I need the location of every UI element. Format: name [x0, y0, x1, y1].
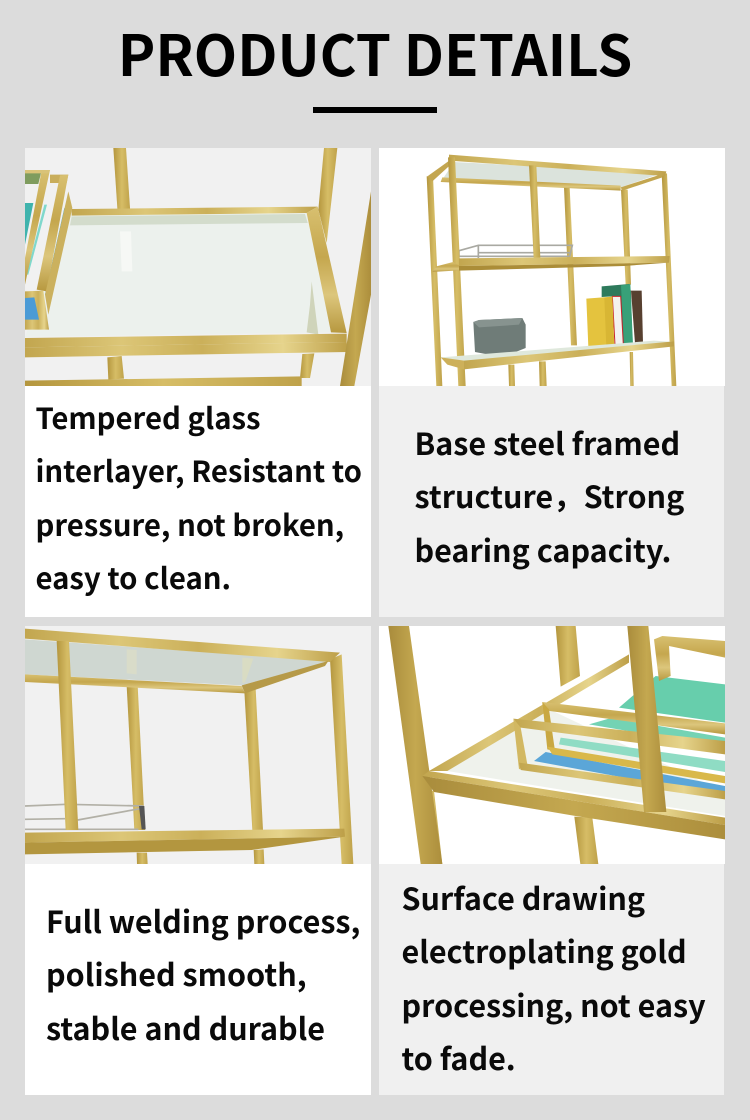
- panel: welding process: [25, 626, 371, 1095]
- caption: Base steel framed: [414, 420, 680, 464]
- middle shelf frame: [25, 829, 345, 854]
- front post: [627, 626, 666, 812]
- title underline: [313, 107, 437, 113]
- stack of books: [586, 284, 643, 347]
- caption: stable and durable: [46, 1005, 325, 1049]
- teal and blue linings: [534, 676, 725, 796]
- glass shelf top: [25, 213, 331, 337]
- back posts: [113, 148, 337, 243]
- stone ornament: [473, 318, 526, 358]
- photo: glass shelf close-up: [25, 148, 371, 386]
- caption: processing, not easy: [402, 982, 706, 1026]
- caption: Surface drawing: [402, 875, 645, 919]
- title: PRODUCT DETAILS: [118, 12, 632, 93]
- gold tray with teal lining: [25, 170, 72, 330]
- glass shelf surface: [447, 706, 725, 816]
- caption: structure，Strong: [414, 473, 684, 517]
- caption: polished smooth,: [46, 951, 307, 995]
- caption: easy to clean.: [36, 556, 231, 598]
- bottom glass shelf: [441, 341, 674, 369]
- shelf frame: [422, 654, 725, 839]
- caption: electroplating gold: [402, 928, 687, 972]
- left post: [388, 626, 442, 864]
- photo: frame corner close-up: [25, 626, 371, 864]
- caption: Tempered glass: [36, 396, 261, 438]
- tray corner: [139, 806, 146, 829]
- caption: pressure, not broken,: [36, 503, 344, 545]
- caption: [414, 420, 684, 571]
- chrome tray: [25, 804, 143, 829]
- caption: [402, 875, 706, 1079]
- photo: full shelving unit: [379, 148, 725, 386]
- top frame bars: [25, 629, 340, 693]
- top frame: [427, 155, 666, 191]
- tinted top glass: [25, 639, 330, 685]
- shelf frame: [25, 207, 348, 357]
- caption: interlayer, Resistant to: [36, 449, 362, 491]
- caption: [36, 396, 362, 598]
- panel: steel frame: [379, 148, 724, 617]
- caption: to fade.: [402, 1035, 516, 1079]
- top glass shelf: [442, 162, 662, 187]
- caption: Full welding process,: [46, 898, 360, 942]
- front post: [57, 641, 78, 830]
- panel: tempered glass: [25, 148, 371, 617]
- photo: tray on glass shelf: [379, 626, 725, 864]
- rear posts: [424, 626, 598, 864]
- back posts: [427, 173, 676, 386]
- chrome tray: [459, 245, 572, 258]
- middle shelf: [432, 256, 670, 272]
- lower legs and shelf: [25, 353, 314, 386]
- front posts: [448, 157, 540, 386]
- caption: [46, 898, 360, 1049]
- gold trays: [513, 636, 725, 799]
- caption: bearing capacity.: [414, 527, 671, 571]
- rear upright posts: [127, 654, 353, 864]
- panel: surface plating: [379, 626, 724, 1095]
- foreground post: [340, 191, 371, 386]
